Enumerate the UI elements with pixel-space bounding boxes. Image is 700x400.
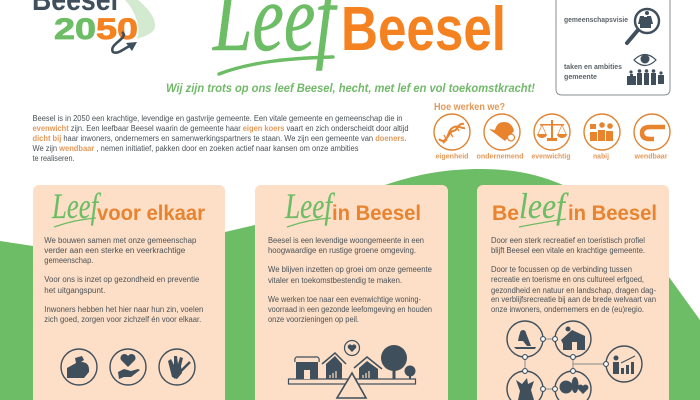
icon: sun lounger — [507, 321, 543, 357]
icon: nabij people — [584, 114, 620, 160]
body text: onze voorzieningen op peil. — [268, 315, 359, 324]
icon: evenwichtig scale: evenwichtig — [532, 154, 570, 160]
title: Leef Beesel — [212, 0, 506, 74]
heading: leef voor elkaar: Leef — [51, 186, 102, 226]
body text — [44, 236, 203, 324]
icon: house with sun — [555, 321, 591, 357]
intro text: Beesel is in 2050 een krachtige, levendige en gastvrije gemeente. Een vitale gemeente en gemeenschap die in — [32, 114, 402, 123]
heading: leef voor elkaar — [51, 186, 205, 227]
icon: person with bar chart — [606, 346, 642, 382]
icon: magnifier with people — [627, 9, 659, 43]
icon: ondernemend wheelbarrow — [476, 114, 524, 160]
body text: gezondheid en natuur en landschap, dragen dag- — [491, 286, 656, 295]
icon: ondernemend wheelbarrow: ondernemend — [476, 154, 524, 160]
heading: beleef in Beesel: leef — [519, 186, 569, 226]
icon: nabij people: nabij — [593, 154, 609, 160]
body text: gemeenschap. — [44, 256, 93, 265]
body text: Door een sterk recreatief en toeristisch profiel — [491, 236, 645, 245]
body text: voorraad in een gezonde leefomgeving en houden — [268, 305, 432, 314]
heading: leef voor elkaar: voor elkaar — [97, 202, 205, 225]
icon: eye above people — [627, 54, 664, 85]
body text: We blijven inzetten op groei om onze gemeente — [268, 265, 433, 274]
legend label: taken en ambities gemeente: taken en ambities — [564, 64, 622, 71]
body text: het uitgangspunt. — [44, 286, 105, 295]
icon: balanced village — [288, 340, 416, 398]
tagline: Wij zijn trots op ons leef Beesel, hecht, met lef en vol toekomstkracht! — [166, 81, 535, 95]
intro text: dicht bij haar inwoners, ondernemers en samenwerkingspartners te staan. We zijn een gemeente van doeners. — [32, 134, 406, 143]
intro text: evenwicht zijn. Een leefbaar Beesel waarin de gemeente haar eigen koers vaart en zich onderscheidt door altijd — [32, 124, 408, 133]
body text: zich goed, zorgen voor zichzelf én voor elkaar. — [44, 315, 201, 324]
heading: beleef in Beesel: in Beesel — [568, 202, 657, 225]
icon: dragon heritage — [507, 371, 543, 400]
heading: leef in Beesel: in Beesel — [332, 202, 421, 225]
logo: Beesel 2050 — [32, 0, 155, 53]
body text — [491, 236, 656, 314]
icon: eigenheid DNA — [434, 114, 470, 160]
heading: leef in Beesel — [284, 186, 421, 227]
logo striped swoosh — [125, 0, 155, 39]
icon: wendbaar bent pipe: wendbaar — [633, 154, 668, 160]
body text: Beesel is een levendige woongemeente in een — [268, 236, 424, 245]
heading: leef in Beesel: Leef — [284, 186, 336, 226]
connected icon network — [507, 321, 642, 400]
icon: evenwichtig scale — [532, 114, 570, 160]
legend label: gemeenschapsvisie: gemeenschapsvisie — [564, 17, 628, 24]
legend label: taken en ambities gemeente — [564, 64, 622, 81]
icon: trees and heart — [555, 371, 591, 400]
logo year 2050: 20 50 — [54, 13, 138, 46]
how we work heading: Hoe werken we? — [434, 102, 505, 113]
icon: hands — [159, 349, 195, 385]
body text: Inwoners hebben het hier naar hun zin, voelen — [44, 305, 203, 314]
body text: recreatie en toerisme en ons cultureel erfgoed, — [491, 275, 644, 284]
body text: Door te focussen op de verbinding tussen — [491, 265, 632, 274]
legend label: taken en ambities gemeente: gemeente — [564, 74, 597, 81]
body text: blijft Beesel een vitale en krachtige gemeente. — [491, 246, 645, 255]
green hill background — [0, 169, 700, 400]
heading: beleef in Beesel: Be — [492, 202, 519, 225]
how we work — [434, 102, 670, 160]
body text: We werken toe naar een evenwichtige woning- — [268, 295, 421, 304]
panel: beleef in Beesel — [477, 185, 669, 400]
title swoosh — [219, 57, 333, 74]
body text — [268, 236, 433, 324]
body text: verder aan een sterke en veerkrachtige — [44, 246, 186, 255]
panel: leef voor elkaar — [33, 185, 225, 400]
body text: onze inwoners, ondernemers en de (eu)regio. — [491, 305, 644, 314]
body text: Voor ons is inzet op gezondheid en preventie — [44, 275, 200, 284]
intro text: We zijn wendbaar , nemen initiatief, pakken door en zoeken actief naar kansen om onze ambities — [32, 144, 359, 153]
body text: en verblijfsrecreatie bij aan de brede welvaart van — [491, 295, 656, 304]
icon: arm muscle — [61, 349, 97, 385]
icon: eigenheid DNA: eigenheid — [436, 154, 468, 160]
body text: hoogwaardige en rustige groene omgeving. — [268, 246, 416, 255]
heading: beleef in Beesel — [492, 186, 657, 227]
logo arrow — [112, 32, 132, 53]
icon: heart in hand — [110, 349, 146, 385]
icon: wendbaar bent pipe — [633, 114, 670, 160]
intro text — [32, 114, 408, 163]
intro text: te realiseren. — [32, 154, 74, 163]
body text: We bouwen samen met onze gemeenschap — [44, 236, 197, 245]
connector nodes — [523, 337, 608, 391]
body text: vitaler en toekomstbestendig te maken. — [268, 276, 402, 285]
panel: leef in Beesel — [255, 185, 448, 400]
legend box — [556, 0, 670, 95]
